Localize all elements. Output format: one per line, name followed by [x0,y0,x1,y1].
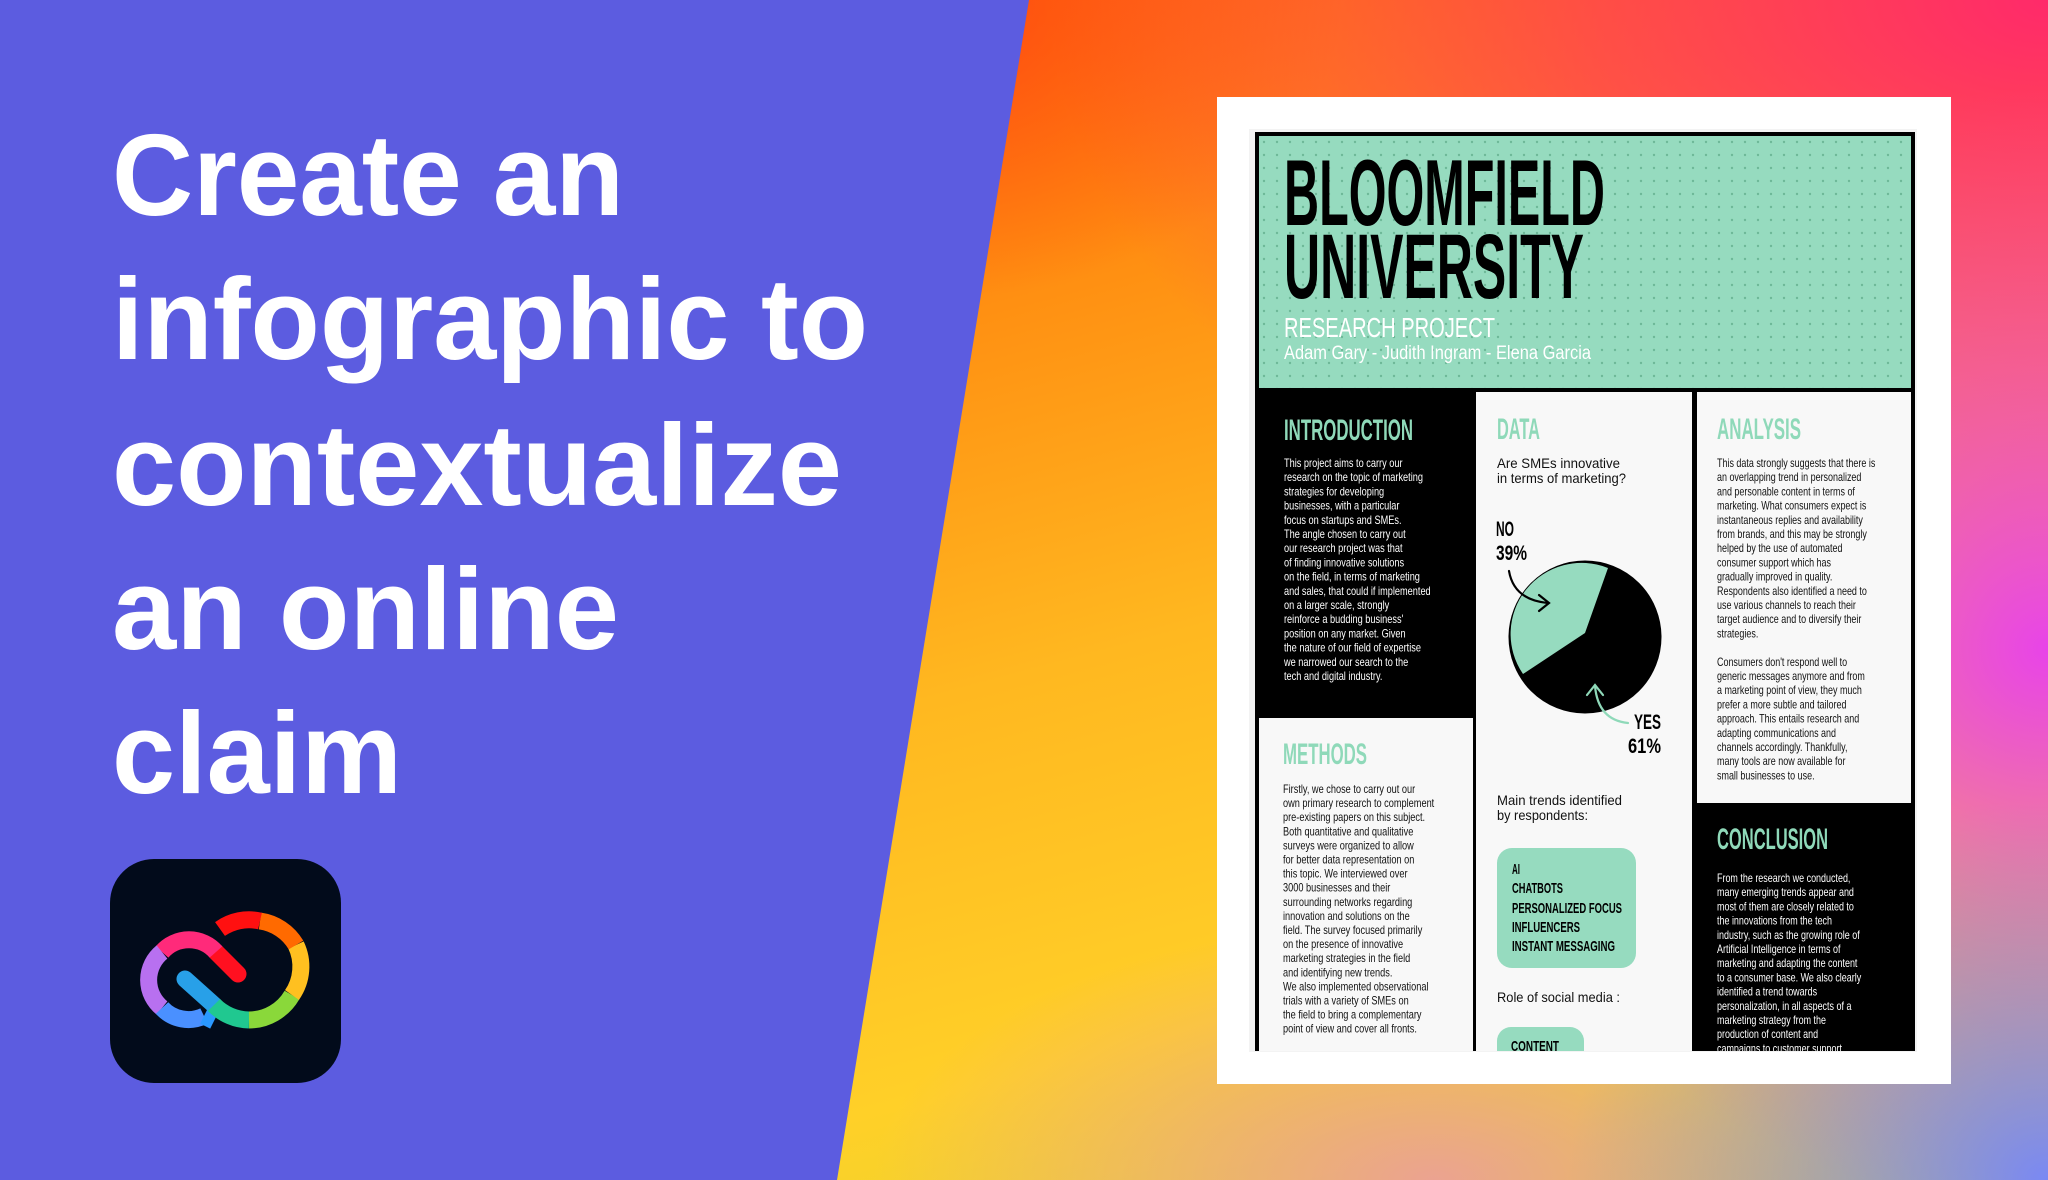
panel: data: Main trends identified [1497,792,1622,808]
panel: methods: for better data representation on [1283,855,1415,867]
trends box: AI [1512,861,1520,878]
arrow: no [1509,571,1549,611]
panel: analysis: Respondents also identified a need to [1717,586,1867,598]
panel: introduction: our research project was that [1284,543,1403,556]
panel: introduction: This project aims to carry our [1284,458,1403,470]
headline: an online [112,544,619,674]
headline: infographic to [112,254,868,384]
panel: conclusion: Artificial Intelligence in terms of [1717,944,1841,956]
panel: methods: Firstly, we chose to carry out our [1283,784,1416,796]
trends box: INSTANT MESSAGING [1512,938,1615,955]
headline: Create an [112,110,624,240]
purple left background [0,0,1029,1180]
panel: data: DATA [1497,413,1540,446]
panel: conclusion: marketing and adapting the content [1717,958,1858,971]
panel: data: Role of social media : [1497,989,1620,1005]
panel: conclusion: From the research we conducted, [1717,873,1850,885]
panel: conclusion: production of content and [1717,1029,1818,1042]
panel: conclusion: identified a trend towards [1717,987,1817,999]
panel: conclusion: marketing strategy from the [1717,1015,1826,1027]
panel: data: by respondents: [1497,807,1588,823]
panel: methods: pre-existing papers on this subject. [1283,812,1425,825]
panel: introduction: position on any market. Given [1284,629,1406,641]
panel: methods: marketing strategies in the field [1283,953,1410,966]
panel: introduction: tech and digital industry. [1284,671,1382,683]
header: Adam Gary - Judith Ingram - Elena Garcia [1284,343,1591,364]
header: BLOOMFIELD [1284,140,1605,245]
panel: analysis: prefer a more subtle and tailored [1717,699,1847,712]
header: RESEARCH PROJECT [1284,312,1495,343]
panel: methods: own primary research to complement [1283,798,1434,810]
panel: introduction: the nature of our field of expertise [1284,643,1421,655]
panel: analysis: adapting communications and [1717,728,1836,740]
trends box [1497,848,1636,968]
arrow: yes [1587,685,1628,723]
panel: analysis: This data strongly suggests that there is [1717,458,1875,470]
panel: conclusion: the innovations from the tech [1717,916,1832,928]
panel: methods: We also implemented observational [1283,982,1428,994]
panel: analysis: a marketing point of view, they much [1717,685,1862,698]
trends box: PERSONALIZED FOCUS [1512,900,1622,917]
panel: analysis: from brands, and this may be strongly [1717,529,1868,541]
content box: CONTENT [1511,1038,1559,1055]
panel: introduction: focus on startups and SMEs. [1284,515,1402,527]
headline: claim [112,688,402,818]
headline: contextualize [112,400,842,530]
pie chart: 39% [1496,542,1527,565]
panel: introduction: of finding innovative solutions [1284,558,1404,570]
panel: methods: Both quantitative and qualitative [1283,826,1414,839]
panel: introduction: businesses, with a particular [1284,501,1400,513]
panel: conclusion: most of them are closely related to [1717,901,1854,914]
panel: analysis: channels accordingly. Thankfully, [1717,742,1847,754]
panel: introduction: and sales, that could if implemented [1284,586,1431,598]
panel: analysis: Consumers don't respond well to [1717,657,1847,669]
panel: analysis: instantaneous replies and availability [1717,515,1864,527]
icon: creative cloud express logo [110,859,341,1083]
panel: analysis: approach. This entails research and [1717,714,1859,726]
headline [112,110,868,818]
panel: analysis: generic messages anymore and from [1717,671,1865,683]
panel: analysis: small businesses to use. [1717,770,1815,783]
panel: introduction: The angle chosen to carry out [1284,529,1406,541]
pie chart: YES [1634,711,1661,734]
panel: analysis: consumer support which has [1717,557,1831,570]
header [1259,136,1911,388]
panel: introduction: strategies for developing [1284,487,1384,499]
panel: methods [1259,718,1473,1058]
panel: data: Are SMEs innovative [1497,455,1620,471]
panel: introduction: we narrowed our search to the [1283,657,1408,669]
panel: introduction: on a larger scale, strongly [1284,600,1390,612]
panel: introduction: reinforce a budding business' [1284,614,1403,627]
panel: methods: field. The survey focused primarily [1283,925,1423,937]
panel: analysis: target audience and to diversify their [1717,614,1862,627]
panel: conclusion: many emerging trends appear and [1717,887,1854,900]
pie chart [1496,518,1661,758]
panel: analysis: an overlapping trend in personalized [1717,472,1862,485]
panel: conclusion: campaigns to customer support. [1717,1043,1844,1056]
panel: methods: surrounding networks regarding [1283,897,1412,909]
panel: methods: and identifying new trends. [1283,967,1392,980]
panel: analysis: ANALYSIS [1717,413,1801,446]
pie chart: 61% [1628,735,1661,758]
panel: conclusion: to a consumer base. We also clearly [1717,972,1862,985]
trends box: CHATBOTS [1512,880,1563,897]
panel: methods: 3000 businesses and their [1283,883,1391,895]
panel: white card [1217,97,1951,1084]
panel: analysis: and personable content in terms of [1717,486,1855,499]
panel: data: in terms of marketing? [1497,470,1626,486]
panel: methods: innovation and solutions on the [1283,911,1410,923]
panel: analysis: use various channels to reach their [1717,600,1856,612]
panel: analysis [1697,392,1911,803]
panel: methods: point of view and cover all fronts. [1283,1024,1417,1036]
panel: methods: the field to bring a complementary [1283,1010,1422,1022]
panel: introduction: on the field, in terms of marketing [1284,572,1420,584]
panel: analysis: helped by the use of automated [1717,543,1843,556]
panel: conclusion [1717,828,1862,1051]
panel: analysis: strategies. [1717,628,1758,641]
panel: analysis: marketing. What consumers expect is [1717,501,1866,513]
panel: conclusion: industry, such as the growing role of [1717,930,1860,942]
panel: methods: METHODS [1283,738,1367,771]
panel: poster [1255,132,1915,1067]
panel: analysis: gradually improved in quality. [1717,572,1832,584]
panel: introduction [1284,419,1430,682]
panel: methods: trials with a variety of SMEs on [1283,996,1409,1008]
panel: data [1476,392,1692,1067]
panel: methods: this topic. We interviewed over [1283,869,1408,881]
panel: conclusion: personalization, in all aspects of a [1717,1001,1852,1013]
panel: introduction: INTRODUCTION [1284,414,1413,447]
content box [1497,1027,1584,1051]
panel: methods: surveys were organized to allow [1283,841,1414,853]
header: UNIVERSITY [1284,216,1584,318]
trends box: INFLUENCERS [1512,919,1580,936]
panel: analysis: many tools are now available for [1717,756,1846,769]
panel: methods: on the presence of innovative [1283,939,1403,951]
pie chart: NO [1496,518,1514,541]
panel: conclusion: CONCLUSION [1717,823,1828,856]
panel: introduction: research on the topic of marketing [1284,472,1423,485]
